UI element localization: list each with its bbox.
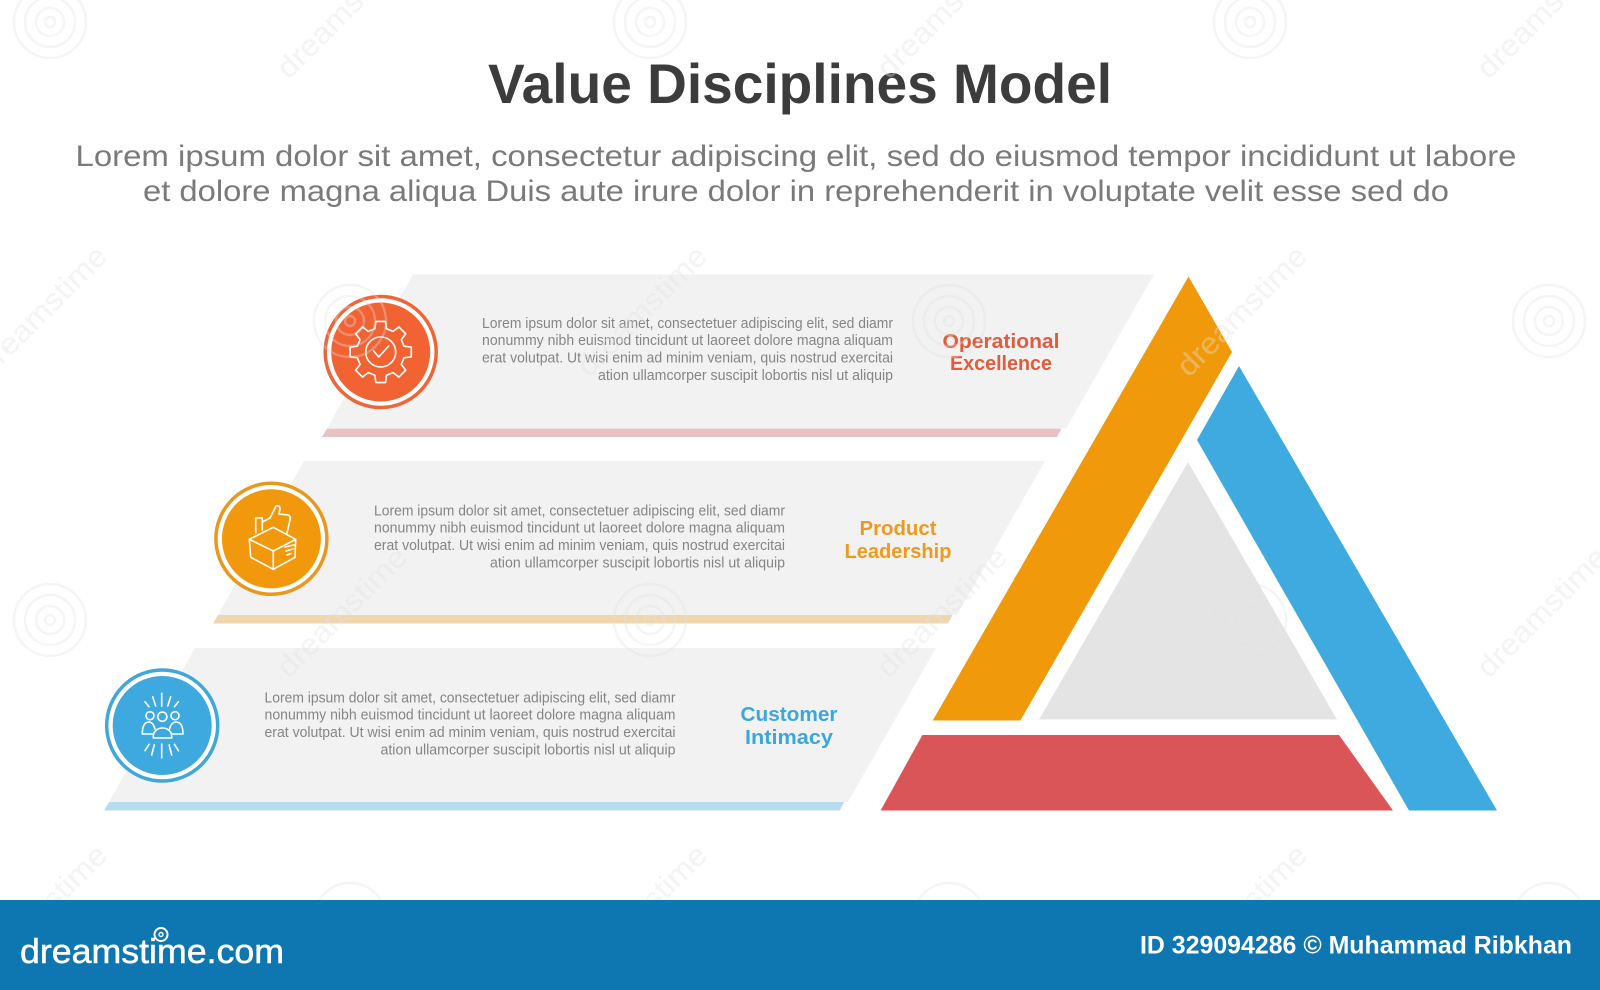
description text: Lorem ipsum dolor sit amet, consectetuer adipiscing elit, sed diamr [264,690,676,706]
label [740,704,838,749]
segment: customer intimacy blue [1197,366,1497,810]
band underline [104,802,844,810]
description text: erat volutpat. Ut wisi enim ad minim veniam, quis nostrud exercitai [374,538,785,554]
segment: operational excellence orange [933,276,1232,720]
band underline [213,615,952,624]
watermark overlay: dreamstime [571,240,714,383]
subtitle text block: Lorem ipsum dolor sit amet, consectetur adipiscing elit, sed do eiusmod tempor incididunt ut labore [76,140,1516,173]
label [942,331,1060,375]
segment: product leadership red [881,735,1393,810]
description text: ation ullamcorper suscipit lobortis nisl ut aliquip [598,368,893,384]
panel: customer intimacy [104,648,936,810]
description text: nonummy nibh euismod tincidunt ut laoreet dolore magna aliquam [482,333,893,349]
title: Value Disciplines Model [488,52,1112,115]
watermark overlay: dreamstime [871,541,1014,684]
label: Customer [740,704,838,726]
subtitle text block: et dolore magna aliqua Duis aute irure dolor in reprehenderit in voluptate velit esse sed do [143,175,1449,208]
watermark overlay: dreamstime [1171,839,1314,982]
description text: erat volutpat. Ut wisi enim ad minim veniam, quis nostrud exercitai [264,725,676,741]
triangle chart [881,276,1497,810]
description text [374,504,785,572]
band background [218,461,1045,615]
band underline [322,429,1062,437]
label: Intimacy [745,727,834,749]
description text: erat volutpat. Ut wisi enim ad minim veniam, quis nostrud exercitai [482,350,893,366]
description text: nonummy nibh euismod tincidunt ut laoreet dolore magna aliquam [264,708,676,724]
description text: ation ullamcorper suscipit lobortis nisl ut aliquip [490,556,785,572]
panel: operational excellence [322,274,1154,437]
description text: nonummy nibh euismod tincidunt ut laoreet dolore magna aliquam [374,520,785,536]
footer banner [0,900,1600,990]
logo: dreamstime.com: dreamstime.com [20,933,284,971]
band background [327,274,1154,429]
description text: Lorem ipsum dolor sit amet, consectetuer adipiscing elit, sed diamr [374,504,785,520]
band background [109,648,936,802]
watermark overlay: dreamstime [1171,240,1314,383]
icon: box with thumbs up [216,483,327,594]
label: Excellence [950,353,1052,375]
watermark overlay: dreamstime [271,541,414,684]
description text [482,316,893,384]
watermark overlay: dreamstime [571,839,714,982]
subtitle text block [76,140,1516,208]
label [844,518,952,563]
label: Leadership [844,541,952,563]
image credit: ID 329094286 © Muhammad Ribkhan [1140,932,1572,960]
label: Product [860,518,937,540]
label: Operational [942,331,1060,353]
inner triangle [1039,462,1337,720]
description text [264,690,676,758]
icon: gear with check [325,296,436,408]
description text: ation ullamcorper suscipit lobortis nisl ut aliquip [380,742,676,758]
description text: Lorem ipsum dolor sit amet, consectetuer adipiscing elit, sed diamr [482,316,893,332]
icon: group of people [107,670,218,781]
panel: product leadership [213,461,1045,624]
